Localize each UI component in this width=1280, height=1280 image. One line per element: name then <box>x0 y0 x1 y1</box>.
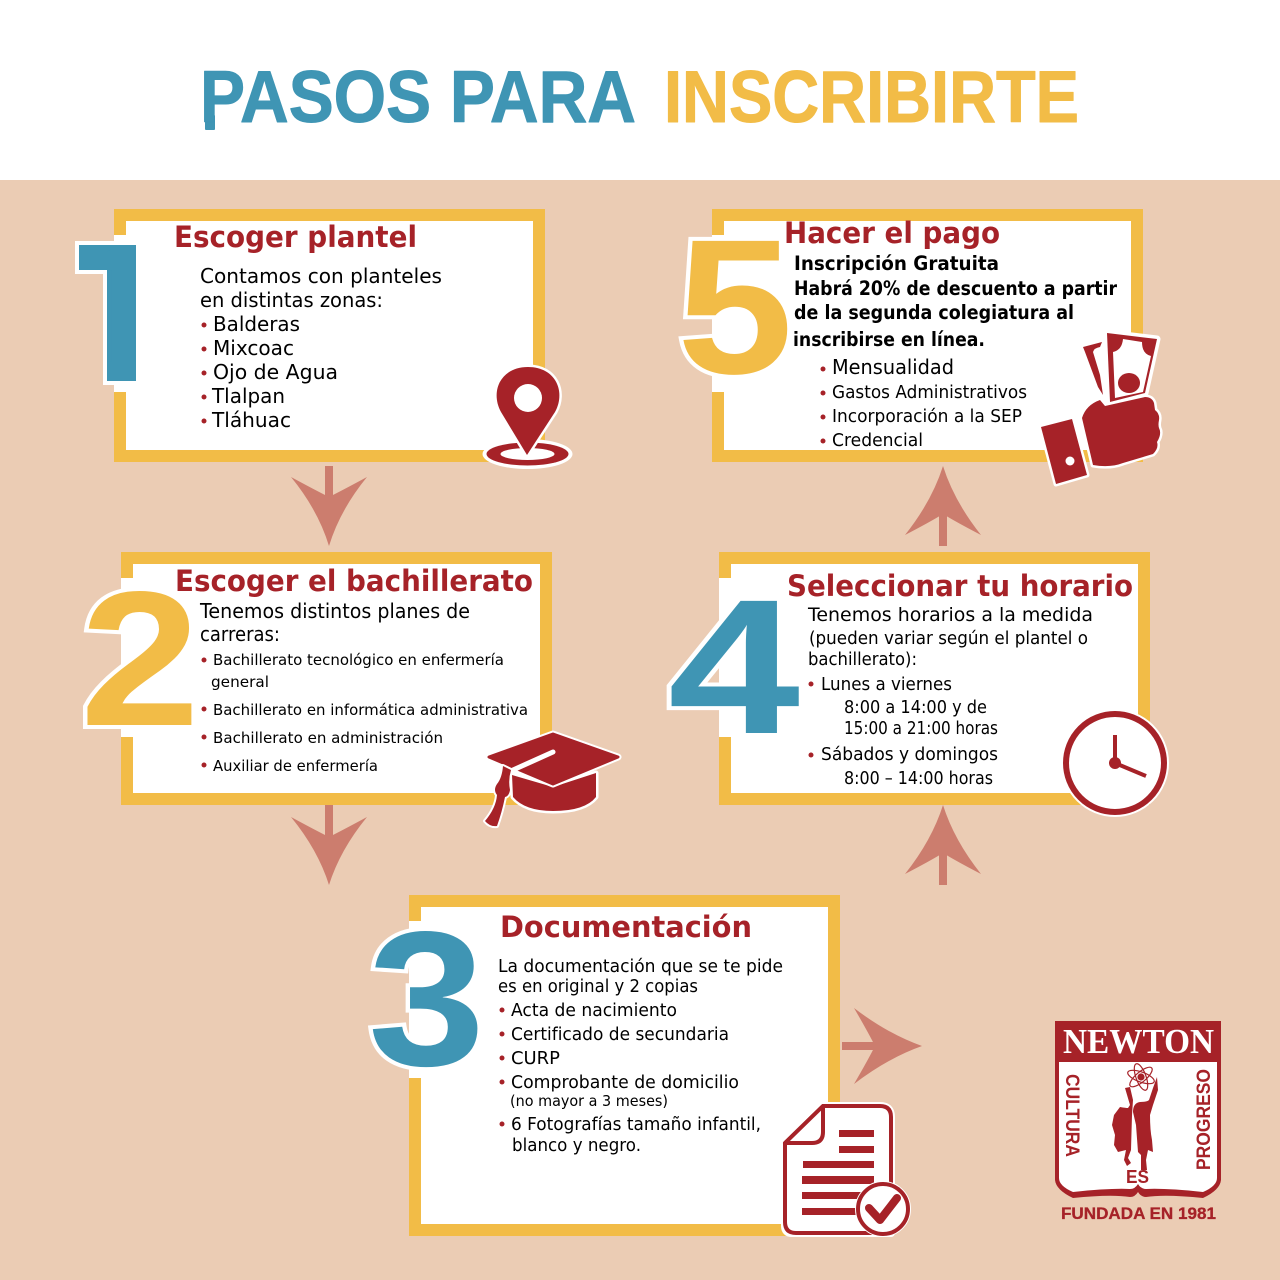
text: horarios: 8:00 a 14:00 y de <box>844 698 987 718</box>
text: bachillerato: general <box>211 673 269 691</box>
text: documentos: Certificado de secundaria <box>511 1025 729 1045</box>
panel: step 3 <box>368 891 834 1230</box>
arrow: step 2 to 3 <box>291 805 367 885</box>
text: pago: Gastos Administrativos <box>832 383 1027 403</box>
text: planteles: Tlalpan <box>211 384 285 408</box>
text: pago: inscribirse en línea. <box>793 328 985 351</box>
text: pago: Incorporación a la SEP <box>832 407 1022 427</box>
text: horarios: Sábados y domingos <box>821 745 998 765</box>
logo side text left: CULTURA <box>1061 1074 1082 1157</box>
title: INSCRIBIRTE <box>664 57 1079 138</box>
icon: location pin <box>482 367 572 469</box>
number 2: 2 <box>80 551 200 766</box>
number 4: 4 <box>668 559 800 774</box>
icon: graduation cap <box>485 734 618 826</box>
panel: step 4 <box>668 558 1144 799</box>
text: bachillerato: Bachillerato en informática administrativa <box>213 701 528 719</box>
text: planteles: Mixcoac <box>213 336 294 360</box>
text: horarios: 15:00 a 21:00 horas <box>844 719 998 739</box>
text: horarios: Tenemos horarios a la medida <box>807 604 1093 626</box>
icon: hand with money <box>1041 333 1160 484</box>
arrow: step 1 to 2 <box>291 466 367 546</box>
number 3: 3 <box>368 891 485 1106</box>
number 1 <box>79 245 136 381</box>
text: documentos <box>498 957 783 1156</box>
text: documentos: CURP <box>511 1049 560 1069</box>
text: bachillerato: Bachillerato tecnológico en enfermería <box>213 651 504 669</box>
heading: seleccionar tu horario: Seleccionar tu horario <box>787 569 1133 603</box>
text: pago: de la segunda colegiatura al <box>794 301 1074 324</box>
text: bachillerato: Auxiliar de enfermería <box>213 757 378 775</box>
text: pago: Credencial <box>832 431 923 451</box>
text: documentos: (no mayor a 3 meses) <box>510 1092 668 1110</box>
text: pago <box>793 252 1117 451</box>
arrow: to logo <box>842 1008 922 1084</box>
text: planteles: Tláhuac <box>211 408 291 432</box>
text: pago: Mensualidad <box>832 355 954 379</box>
logo: Newton <box>1055 1021 1221 1223</box>
text: bachillerato: Bachillerato en administración <box>213 729 443 747</box>
text: documentos: Acta de nacimiento <box>511 1001 677 1021</box>
text: planteles: Balderas <box>213 312 300 336</box>
text: bachillerato <box>199 599 528 775</box>
logo ES: ES <box>1126 1167 1149 1187</box>
panel: step 2 <box>80 551 546 799</box>
text: documentos: 6 Fotografías tamaño infantil, <box>511 1115 761 1135</box>
heading: hacer el pago: Hacer el pago <box>784 216 1000 250</box>
heading: documentacion: Documentación <box>500 910 752 944</box>
text: bachillerato: carreras: <box>200 622 280 646</box>
text: documentos: es en original y 2 copias <box>498 977 698 997</box>
icon: clock <box>1061 709 1169 817</box>
text: bachillerato: Tenemos distintos planes de <box>199 599 470 623</box>
logo founded text: FUNDADA EN 1981 <box>1061 1204 1216 1223</box>
text: horarios: Lunes a viernes <box>821 675 952 695</box>
text: documentos: blanco y negro. <box>512 1136 641 1156</box>
text: documentos: Comprobante de domicilio <box>511 1073 739 1093</box>
logo wordmark: NEWTON <box>1063 1022 1214 1061</box>
text: pago: Habrá 20% de descuento a partir <box>794 277 1117 300</box>
text: planteles <box>200 264 442 432</box>
arrow: step 4 to 5 <box>905 466 981 546</box>
logo atom <box>1126 1062 1156 1092</box>
panel: step 5 <box>677 199 1137 456</box>
logo side text right: PROGRESO <box>1194 1069 1215 1170</box>
number 1: 1 <box>73 206 165 423</box>
text: planteles: Ojo de Agua <box>213 360 338 384</box>
panel: step 1 <box>73 206 539 456</box>
title: PASOS PARA <box>200 57 636 138</box>
text: planteles: en distintas zonas: <box>200 288 383 312</box>
icon: document with check <box>785 1106 909 1235</box>
text: horarios: 8:00 – 14:00 horas <box>844 769 993 789</box>
heading: escoger el bachillerato: Escoger el bachillerato <box>175 564 533 598</box>
text: horarios: bachillerato): <box>808 650 917 670</box>
text: horarios <box>807 604 1093 789</box>
number 5: 5 <box>677 199 793 414</box>
text: planteles: Contamos con planteles <box>200 264 442 288</box>
heading: escoger plantel: Escoger plantel <box>174 220 417 254</box>
logo figures <box>1112 1077 1158 1170</box>
title <box>200 57 1079 138</box>
text: pago: Inscripción Gratuita <box>794 252 999 275</box>
text: documentos: La documentación que se te pide <box>498 957 783 977</box>
arrow: step 3 to 4 <box>905 805 981 885</box>
text: horarios: (pueden variar según el plantel o <box>809 629 1088 649</box>
